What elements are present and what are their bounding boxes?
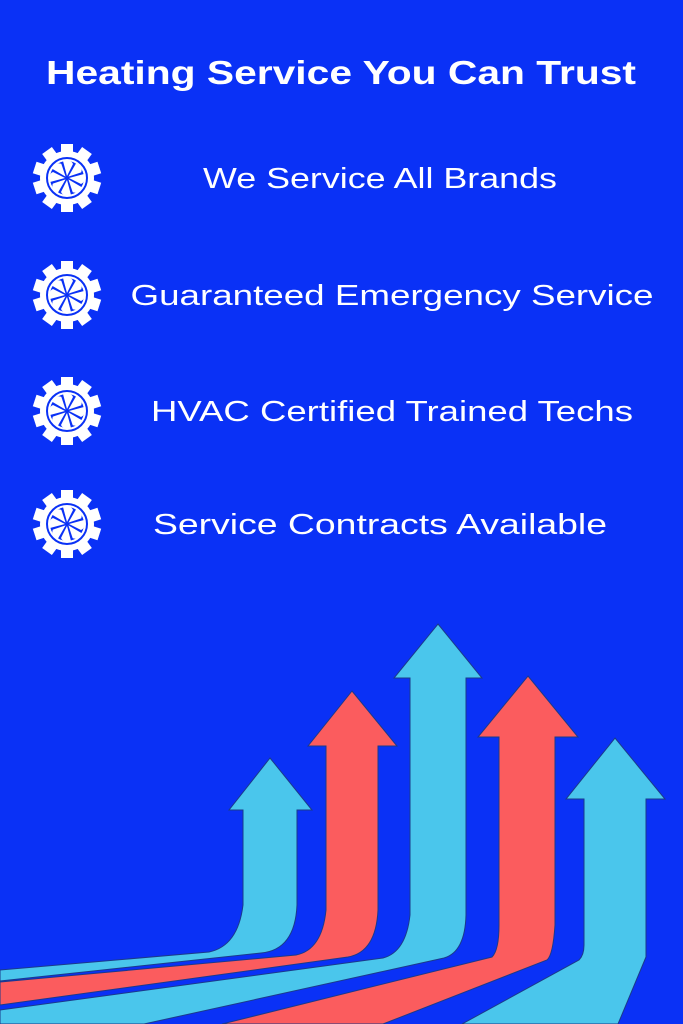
- arrow 2 red: [0, 691, 397, 1005]
- item 2: [33, 261, 653, 329]
- text: brands: We Service All Brands: [203, 163, 557, 195]
- arrow 4 red: [222, 676, 578, 1024]
- icon: gear fan: [33, 144, 101, 212]
- arrow 3 blue: [0, 624, 482, 1024]
- arrows illustration: [0, 624, 665, 1024]
- text: techs: HVAC Certified Trained Techs: [151, 396, 633, 428]
- arrow 5 blue: [462, 738, 665, 1024]
- icon: gear fan: [33, 490, 101, 558]
- title: Heating Service You Can Trust: [46, 54, 636, 91]
- arrow 1 blue: [0, 758, 312, 981]
- text: emergency: Guaranteed Emergency Service: [130, 280, 654, 312]
- item 1: [33, 144, 557, 212]
- icon: gear fan: [33, 261, 101, 329]
- icon: gear fan: [33, 377, 101, 445]
- item 4: [33, 490, 607, 558]
- item 3: [33, 377, 633, 445]
- text: contracts: Service Contracts Available: [153, 509, 607, 541]
